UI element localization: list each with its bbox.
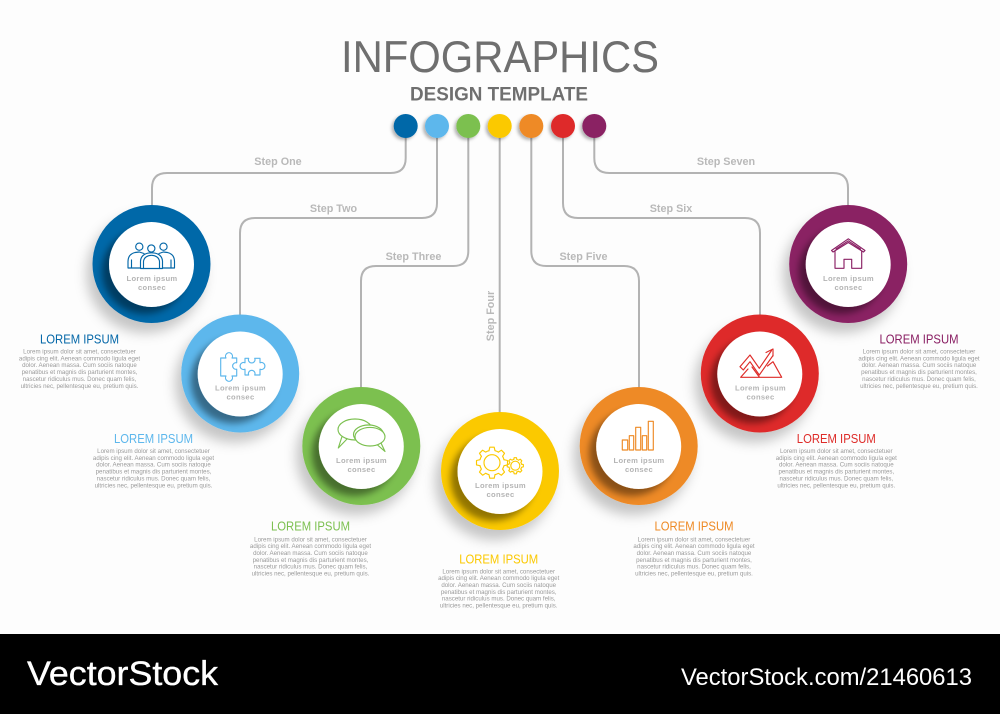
step 4 text: penatibus et magnis dis parturient montes, xyxy=(441,589,557,596)
step 1 text: Lorem ipsum dolor sit amet, consectetuer xyxy=(23,348,136,356)
step 7 text: dolor. Aenean massa. Cum sociis natoque xyxy=(862,362,977,369)
circle caption xyxy=(735,384,786,402)
step 1 text xyxy=(19,333,140,390)
icon: growth chart xyxy=(740,349,782,377)
circle caption: Lorem ipsum xyxy=(215,384,266,392)
step labels: Step Two xyxy=(310,203,357,215)
step 5 text: dolor. Aenean massa. Cum sociis natoque xyxy=(637,550,752,557)
icon: bar chart xyxy=(622,421,653,450)
step 4 text: Lorem ipsum dolor sit amet, consectetuer xyxy=(442,568,555,575)
step 3 text xyxy=(250,520,371,578)
circle caption xyxy=(336,456,387,474)
circle caption: consec xyxy=(747,392,774,402)
circle caption: consec xyxy=(625,465,653,474)
circle caption xyxy=(215,384,266,402)
circle caption: consec xyxy=(348,465,375,474)
circle caption: Lorem ipsum xyxy=(614,456,664,465)
step 7 text: Lorem ipsum dolor sit amet, consectetuer xyxy=(863,348,975,356)
footer url: VectorStock.com/21460613 xyxy=(681,664,972,691)
step 2 circle xyxy=(181,314,299,432)
step 5 text: LOREM IPSUM xyxy=(654,520,734,534)
circle caption: Lorem ipsum xyxy=(475,481,526,490)
step 2 text: nascetur ridiculus mus. Donec quam felis, xyxy=(97,475,211,482)
step 4 circle xyxy=(441,412,559,530)
circle caption: consec xyxy=(138,283,166,292)
step 1 text: adipis cing elit. Aenean commodo ligula eget xyxy=(19,355,140,362)
step 5 circle xyxy=(580,387,698,505)
step 4 text: ultricies nec, pellentesque eu, pretium quis. xyxy=(440,603,558,610)
step 1 text: dolor. Aenean massa. Cum sociis natoque xyxy=(22,362,137,369)
step 4 text: LOREM IPSUM xyxy=(459,552,538,566)
step labels: Step Three xyxy=(386,251,441,263)
step 5 text: ultricies nec, pellentesque eu, pretium quis. xyxy=(635,571,753,578)
step 6 text: Lorem ipsum dolor sit amet, consectetuer xyxy=(780,448,893,455)
step 1 text: LOREM IPSUM xyxy=(40,333,119,347)
step 3 text: LOREM IPSUM xyxy=(271,520,350,534)
step 6 text: dolor. Aenean massa. Cum sociis natoque xyxy=(779,462,894,469)
step 3 text: dolor. Aenean massa. Cum sociis natoque xyxy=(253,550,368,557)
step 7 text xyxy=(858,333,980,390)
step 7 circle xyxy=(789,205,907,323)
step 5 text: nascetur ridiculus mus. Donec quam felis, xyxy=(637,564,751,571)
step 2 text: penatibus et magnis dis parturient montes, xyxy=(96,469,212,476)
subtitle: DESIGN TEMPLATE xyxy=(410,84,588,106)
circle caption: consec xyxy=(227,392,254,402)
circle caption: Lorem ipsum xyxy=(336,456,387,465)
icon: chat bubbles xyxy=(338,419,385,452)
step 2 text: adipis cing elit. Aenean commodo ligula eget xyxy=(93,455,214,462)
step 6 text: adipis cing elit. Aenean commodo ligula eget xyxy=(776,455,897,462)
icon: puzzle xyxy=(221,353,265,381)
step 1 circle xyxy=(92,205,210,323)
step 1 text: penatibus et magnis dis parturient montes, xyxy=(22,369,138,376)
step 3 text: ultricies nec, pellentesque eu, pretium quis. xyxy=(252,571,370,578)
circle caption: consec xyxy=(835,283,862,292)
step 2 text: ultricies nec, pellentesque eu, pretium quis. xyxy=(95,482,213,489)
step 2 text: LOREM IPSUM xyxy=(114,432,193,446)
step labels xyxy=(254,156,755,341)
step 5 text: adipis cing elit. Aenean commodo ligula eget xyxy=(633,543,755,550)
circle caption xyxy=(823,274,874,292)
step 1 text: ultricies nec, pellentesque eu, pretium quis. xyxy=(21,383,139,390)
step 4 text: dolor. Aenean massa. Cum sociis natoque xyxy=(441,582,557,589)
step 2 text: Lorem ipsum dolor sit amet, consectetuer xyxy=(97,448,210,455)
step 6 text xyxy=(776,432,897,489)
step 3 circle xyxy=(302,387,420,505)
step 6 text: nascetur ridiculus mus. Donec quam felis, xyxy=(779,475,893,482)
title: INFOGRAPHICS xyxy=(341,33,659,82)
step 3 text: nascetur ridiculus mus. Donec quam felis, xyxy=(254,564,368,571)
icon: house xyxy=(832,239,865,268)
circle caption xyxy=(614,456,664,474)
circle caption: Lorem ipsum xyxy=(127,274,177,283)
circle caption xyxy=(475,481,526,499)
circle caption xyxy=(127,274,177,292)
step labels: Step Four xyxy=(485,290,497,341)
step 7 text: LOREM IPSUM xyxy=(880,333,958,347)
step 3 text: adipis cing elit. Aenean commodo ligula eget xyxy=(250,543,371,550)
step 6 circle xyxy=(701,314,819,432)
step 5 text: Lorem ipsum dolor sit amet, consectetuer xyxy=(638,536,750,543)
step labels: Step Seven xyxy=(697,156,755,168)
step 5 text xyxy=(633,520,755,578)
colored dots xyxy=(394,114,606,138)
step 2 text xyxy=(93,432,214,489)
step labels: Step One xyxy=(254,156,302,168)
step 3 text: Lorem ipsum dolor sit amet, consectetuer xyxy=(254,536,367,543)
step 7 text: adipis cing elit. Aenean commodo ligula eget xyxy=(858,355,980,362)
step 4 text: nascetur ridiculus mus. Donec quam felis, xyxy=(442,596,556,603)
step 5 text: penatibus et magnis dis parturient montes, xyxy=(636,557,752,564)
step 3 text: penatibus et magnis dis parturient montes, xyxy=(253,557,369,564)
step 6 text: penatibus et magnis dis parturient montes, xyxy=(778,469,894,476)
step 4 text xyxy=(438,552,560,610)
footer brand: VectorStock xyxy=(27,655,219,693)
step labels: Step Five xyxy=(559,251,608,263)
step 6 text: LOREM IPSUM xyxy=(797,432,876,446)
circle caption: Lorem ipsum xyxy=(823,274,874,283)
icon: gears xyxy=(476,447,523,478)
step 7 text: nascetur ridiculus mus. Donec quam felis, xyxy=(862,376,976,383)
step 7 text: penatibus et magnis dis parturient montes, xyxy=(861,369,977,376)
step 4 text: adipis cing elit. Aenean commodo ligula eget xyxy=(438,575,560,582)
circle caption: Lorem ipsum xyxy=(735,384,786,392)
step labels: Step Six xyxy=(650,203,692,215)
step 2 text: dolor. Aenean massa. Cum sociis natoque xyxy=(96,462,211,469)
step 6 text: ultricies nec, pellentesque eu, pretium quis. xyxy=(777,482,895,489)
step 7 text: ultricies nec, pellentesque eu, pretium quis. xyxy=(860,383,978,390)
circle caption: consec xyxy=(487,490,514,499)
footer bar xyxy=(0,634,1000,714)
icon: people xyxy=(128,243,174,268)
step 1 text: nascetur ridiculus mus. Donec quam felis, xyxy=(23,376,137,383)
connector lines xyxy=(152,126,848,413)
